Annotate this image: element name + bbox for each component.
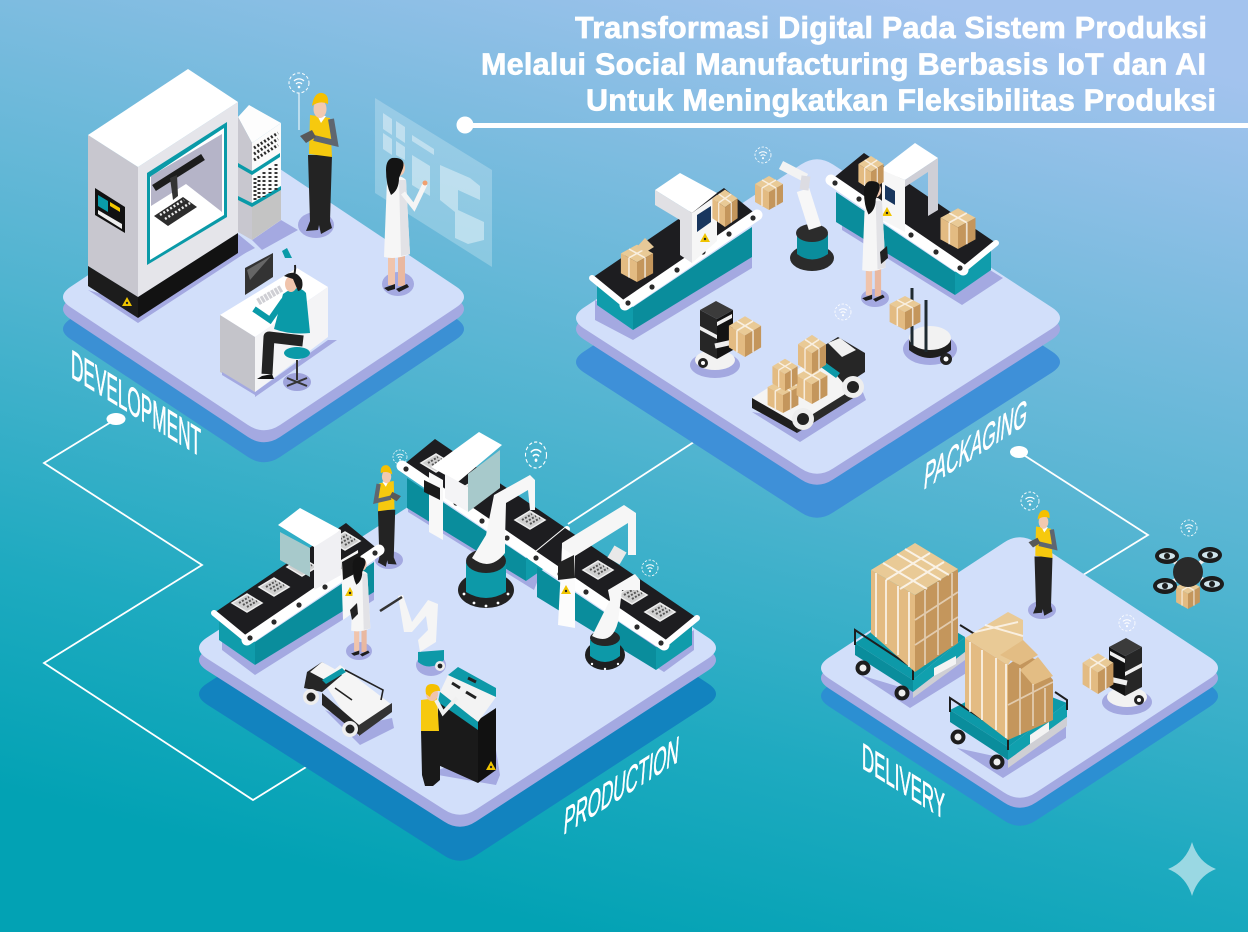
title block: Transformasi Digital Pada Sistem Produksi <box>575 11 1207 45</box>
title block <box>481 11 1216 118</box>
conveyor front left <box>214 508 379 675</box>
panel: development: DEVELOPMENT <box>71 341 201 466</box>
robot arm with parcel <box>755 147 834 271</box>
icon: wifi signal <box>289 73 309 130</box>
hologram panel <box>375 98 492 267</box>
small robot arm on conveyor <box>585 574 640 670</box>
big robot arm <box>458 475 535 608</box>
round mobile robot with parcel <box>890 288 957 365</box>
connector lines <box>44 419 1148 800</box>
title block: Untuk Meningkatkan Fleksibilitas Produksi <box>586 84 1216 118</box>
platform: development <box>63 164 464 462</box>
panel: packaging <box>576 143 1060 518</box>
panel: delivery: DELIVERY <box>862 734 945 828</box>
worker: inspector with clipboard <box>861 181 889 307</box>
icon: wifi signal <box>1021 492 1039 510</box>
icon: wifi signal <box>393 450 407 464</box>
worker: console operator <box>421 684 457 786</box>
drone with parcel <box>1153 520 1224 609</box>
worker: scientist at hologram <box>382 158 428 296</box>
panel: production: PRODUCTION <box>562 727 681 843</box>
worker: inspector woman <box>346 557 372 660</box>
conveyor back with gate <box>402 432 567 590</box>
conveyor left with boxes <box>592 173 757 340</box>
cart two with pallet <box>950 612 1067 778</box>
worker: drone pilot <box>1028 510 1056 619</box>
platform: packaging <box>576 159 1060 518</box>
panel: development <box>63 69 492 466</box>
worker: engineer with tablet <box>298 93 335 238</box>
title block: Melalui Social Manufacturing Berbasis IoT dan AI <box>481 48 1206 82</box>
panel: delivery <box>821 492 1224 828</box>
machine cabinet <box>228 105 298 262</box>
icon: wifi signal <box>526 442 546 468</box>
connector dot <box>106 413 126 425</box>
desk with seated designer <box>220 248 337 397</box>
worker: operator with tablet <box>375 465 403 569</box>
panel: packaging: PACKAGING <box>922 390 1029 498</box>
icon: wifi signals <box>835 304 851 320</box>
conveyor right with boxes <box>831 143 1003 305</box>
icon: sparkle star <box>1168 842 1216 896</box>
platform cart <box>303 662 394 745</box>
small mobile robot arm <box>380 595 446 676</box>
title rule with dot <box>456 116 1248 134</box>
mobile robot holding parcel <box>690 301 761 378</box>
platform: delivery <box>821 537 1218 826</box>
connector dot <box>1010 446 1028 458</box>
cart one with pallet <box>855 543 973 708</box>
cart with stacked parcels <box>752 335 866 442</box>
icon: wifi signal <box>642 560 658 576</box>
large 3D printer machine <box>88 69 250 323</box>
conveyor front right with gantry <box>532 505 697 672</box>
platform: production <box>199 478 716 861</box>
control console <box>438 667 500 785</box>
mobile robot holding parcel <box>1083 615 1152 715</box>
panel: production <box>199 432 716 861</box>
